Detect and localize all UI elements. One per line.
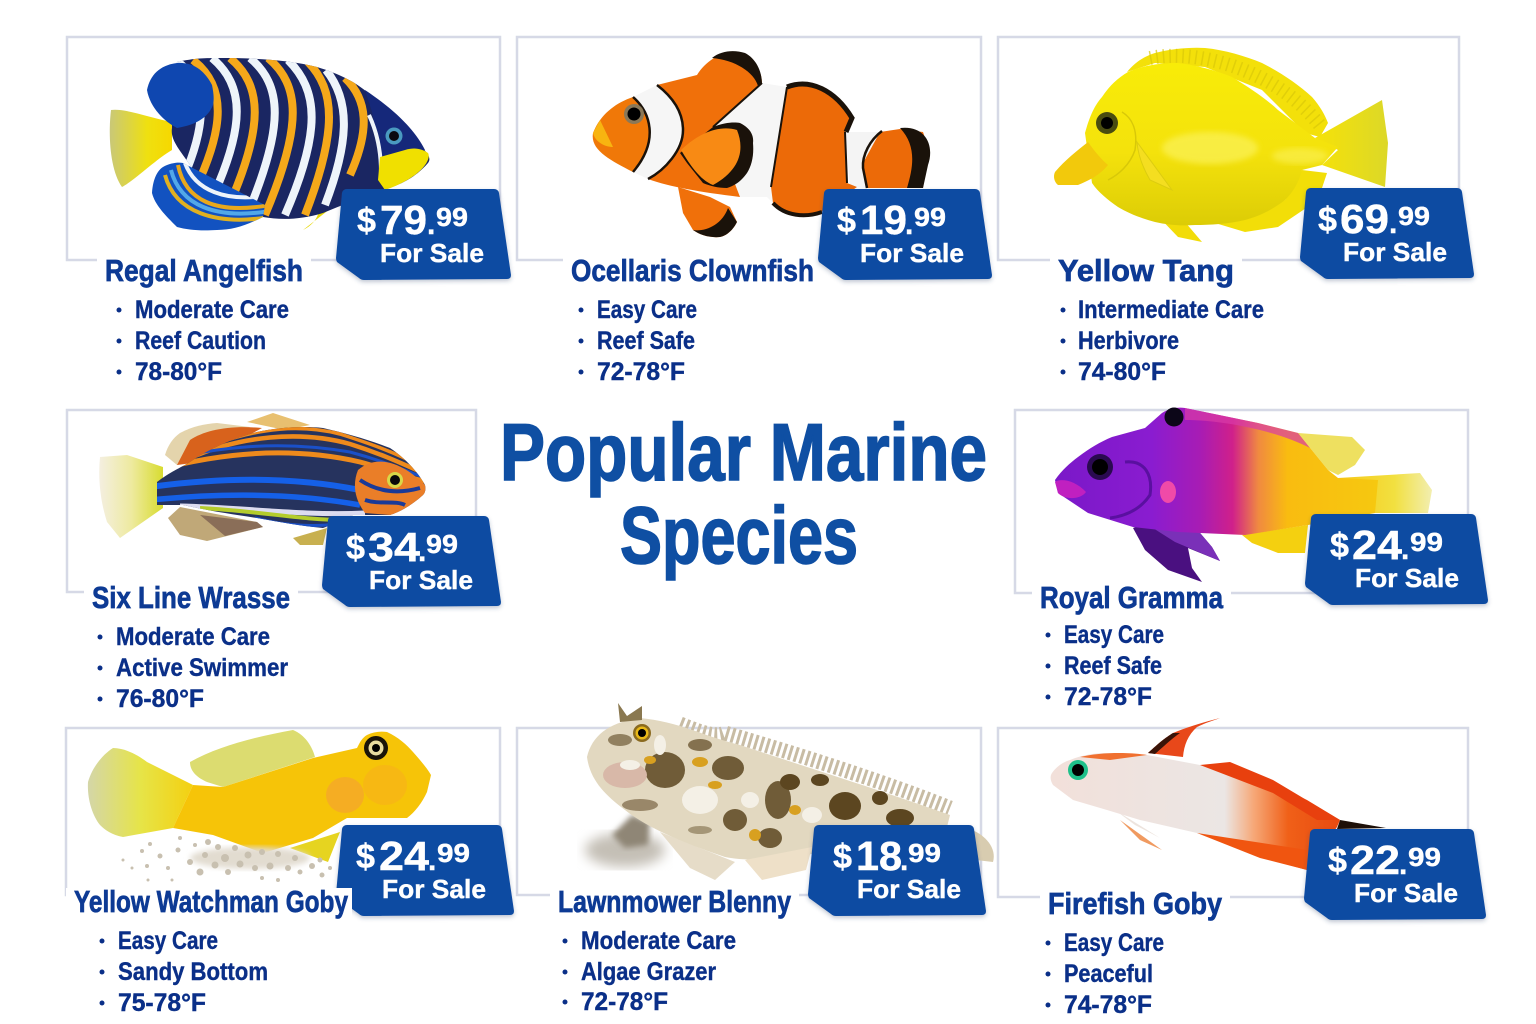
fish: regal angelfish <box>110 58 429 230</box>
care list: 72-78°F <box>581 988 668 1016</box>
care list: Easy Care <box>597 296 697 324</box>
panel: Six Line Wrasse <box>67 410 501 713</box>
card frame <box>998 728 1468 897</box>
price tag <box>1304 829 1486 920</box>
care list: Moderate Care <box>581 927 736 955</box>
price tag: 99 <box>437 838 470 868</box>
price tag <box>1300 188 1474 279</box>
care list: 76-80°F <box>116 685 204 713</box>
card frame <box>1015 410 1468 593</box>
price tag: . <box>428 844 436 877</box>
care list: Sandy Bottom <box>118 958 268 986</box>
card frame <box>66 728 500 895</box>
price tag: $ <box>1328 842 1347 880</box>
price tag: 18 <box>856 833 902 879</box>
panel: Firefish Goby <box>998 718 1486 1019</box>
panel: Lawnmower Blenny <box>517 703 994 1016</box>
care list: 72-78°F <box>597 358 685 386</box>
name: Royal Gramma <box>1040 580 1224 615</box>
price tag: 34 <box>368 524 420 570</box>
name: Six Line Wrasse <box>92 580 290 615</box>
care list <box>98 623 288 713</box>
care list <box>562 927 736 1016</box>
price tag: 99 <box>426 529 458 559</box>
price tag: . <box>1401 533 1409 566</box>
price tag <box>818 189 992 280</box>
fish: firefish goby <box>1051 718 1386 870</box>
name background <box>66 888 352 920</box>
care list: Moderate Care <box>116 623 270 651</box>
price tag: . <box>1399 848 1407 881</box>
care list: Easy Care <box>1064 621 1164 649</box>
title <box>500 408 987 581</box>
care list <box>1046 621 1164 711</box>
panel: Royal Gramma <box>1015 408 1488 711</box>
price tag: For Sale <box>382 874 486 904</box>
name: Regal Angelfish <box>105 253 303 288</box>
price tag <box>336 189 511 280</box>
price tag: 99 <box>1408 842 1441 872</box>
card frame <box>67 410 476 592</box>
price tag <box>808 825 986 916</box>
name background <box>1040 887 1230 921</box>
care list: Easy Care <box>1064 929 1164 957</box>
price tag: 69 <box>1340 196 1389 242</box>
care list: 78-80°F <box>135 358 222 386</box>
name background <box>550 884 799 920</box>
price tag: 79 <box>380 197 427 243</box>
price tag: . <box>900 844 908 877</box>
care list <box>1046 929 1164 1019</box>
panel: Yellow Tang <box>998 37 1474 386</box>
care list <box>578 296 697 386</box>
care list: 74-78°F <box>1064 991 1152 1019</box>
price tag <box>1305 514 1488 605</box>
name background <box>97 252 311 286</box>
fish: lawnmower blenny <box>585 703 994 880</box>
price tag: $ <box>837 202 856 240</box>
price tag: 99 <box>908 838 941 868</box>
price tag: $ <box>356 838 375 876</box>
fish: yellow tang <box>1054 48 1388 242</box>
panel: Regal Angelfish <box>67 37 511 386</box>
care list: Reef Safe <box>1064 652 1162 680</box>
panel: Ocellaris Clownfish <box>517 37 992 386</box>
panel: Yellow Watchman Goby <box>66 728 514 1017</box>
price tag: For Sale <box>857 874 961 904</box>
name background <box>1050 252 1242 286</box>
price tag: For Sale <box>369 565 473 595</box>
fish: six line wrasse <box>99 413 430 545</box>
price tag: For Sale <box>380 238 484 268</box>
care list: Peaceful <box>1064 960 1153 988</box>
title: Popular Marine <box>500 408 987 498</box>
price tag: For Sale <box>860 238 964 268</box>
fish: royal gramma <box>1055 408 1432 582</box>
price tag: . <box>1389 207 1397 240</box>
price tag: For Sale <box>1354 878 1458 908</box>
price tag: 24 <box>379 833 429 879</box>
name background <box>563 252 822 286</box>
price tag: 99 <box>914 202 946 232</box>
price tag: 24 <box>1352 522 1402 568</box>
care list: Reef Caution <box>135 327 266 355</box>
care list <box>100 927 268 1017</box>
card frame <box>517 728 981 895</box>
fish: clownfish <box>593 51 930 237</box>
price tag <box>336 825 514 916</box>
price tag: 99 <box>1410 527 1443 557</box>
price tag: . <box>418 535 426 568</box>
price tag: . <box>427 208 435 241</box>
price tag: $ <box>1330 527 1349 565</box>
name: Ocellaris Clownfish <box>571 253 814 288</box>
name background <box>84 582 298 614</box>
price tag: $ <box>833 838 852 876</box>
name: Yellow Watchman Goby <box>74 884 349 919</box>
care list: 72-78°F <box>1064 683 1152 711</box>
care list: Intermediate Care <box>1078 296 1264 324</box>
care list: Reef Safe <box>597 327 695 355</box>
card frame <box>67 37 500 260</box>
price tag: $ <box>346 529 365 567</box>
care list <box>1060 296 1264 386</box>
name: Yellow Tang <box>1058 253 1234 288</box>
care list: Algae Grazer <box>581 958 716 986</box>
price tag: 22 <box>1350 837 1400 883</box>
care list: 75-78°F <box>118 989 206 1017</box>
care list <box>116 296 289 386</box>
price tag: $ <box>1318 201 1337 239</box>
card frame <box>517 37 981 260</box>
price tag: For Sale <box>1355 563 1459 593</box>
sand <box>122 836 332 882</box>
price tag <box>322 516 501 607</box>
name background <box>1032 583 1231 615</box>
card frame <box>998 37 1459 260</box>
care list: Active Swimmer <box>116 654 288 682</box>
care list: Herbivore <box>1078 327 1179 355</box>
price tag: 19 <box>860 197 907 243</box>
name: Lawnmower Blenny <box>558 884 792 919</box>
fish: yellow watchman goby <box>88 730 431 862</box>
price tag: For Sale <box>1343 237 1447 267</box>
name: Firefish Goby <box>1048 886 1223 921</box>
care list: 74-80°F <box>1078 358 1166 386</box>
price tag: 99 <box>436 202 468 232</box>
care list: Moderate Care <box>135 296 289 324</box>
price tag: $ <box>357 202 376 240</box>
price tag: 99 <box>1398 201 1430 231</box>
title: Species <box>620 491 858 581</box>
care list: Easy Care <box>118 927 218 955</box>
price tag: . <box>905 208 913 241</box>
